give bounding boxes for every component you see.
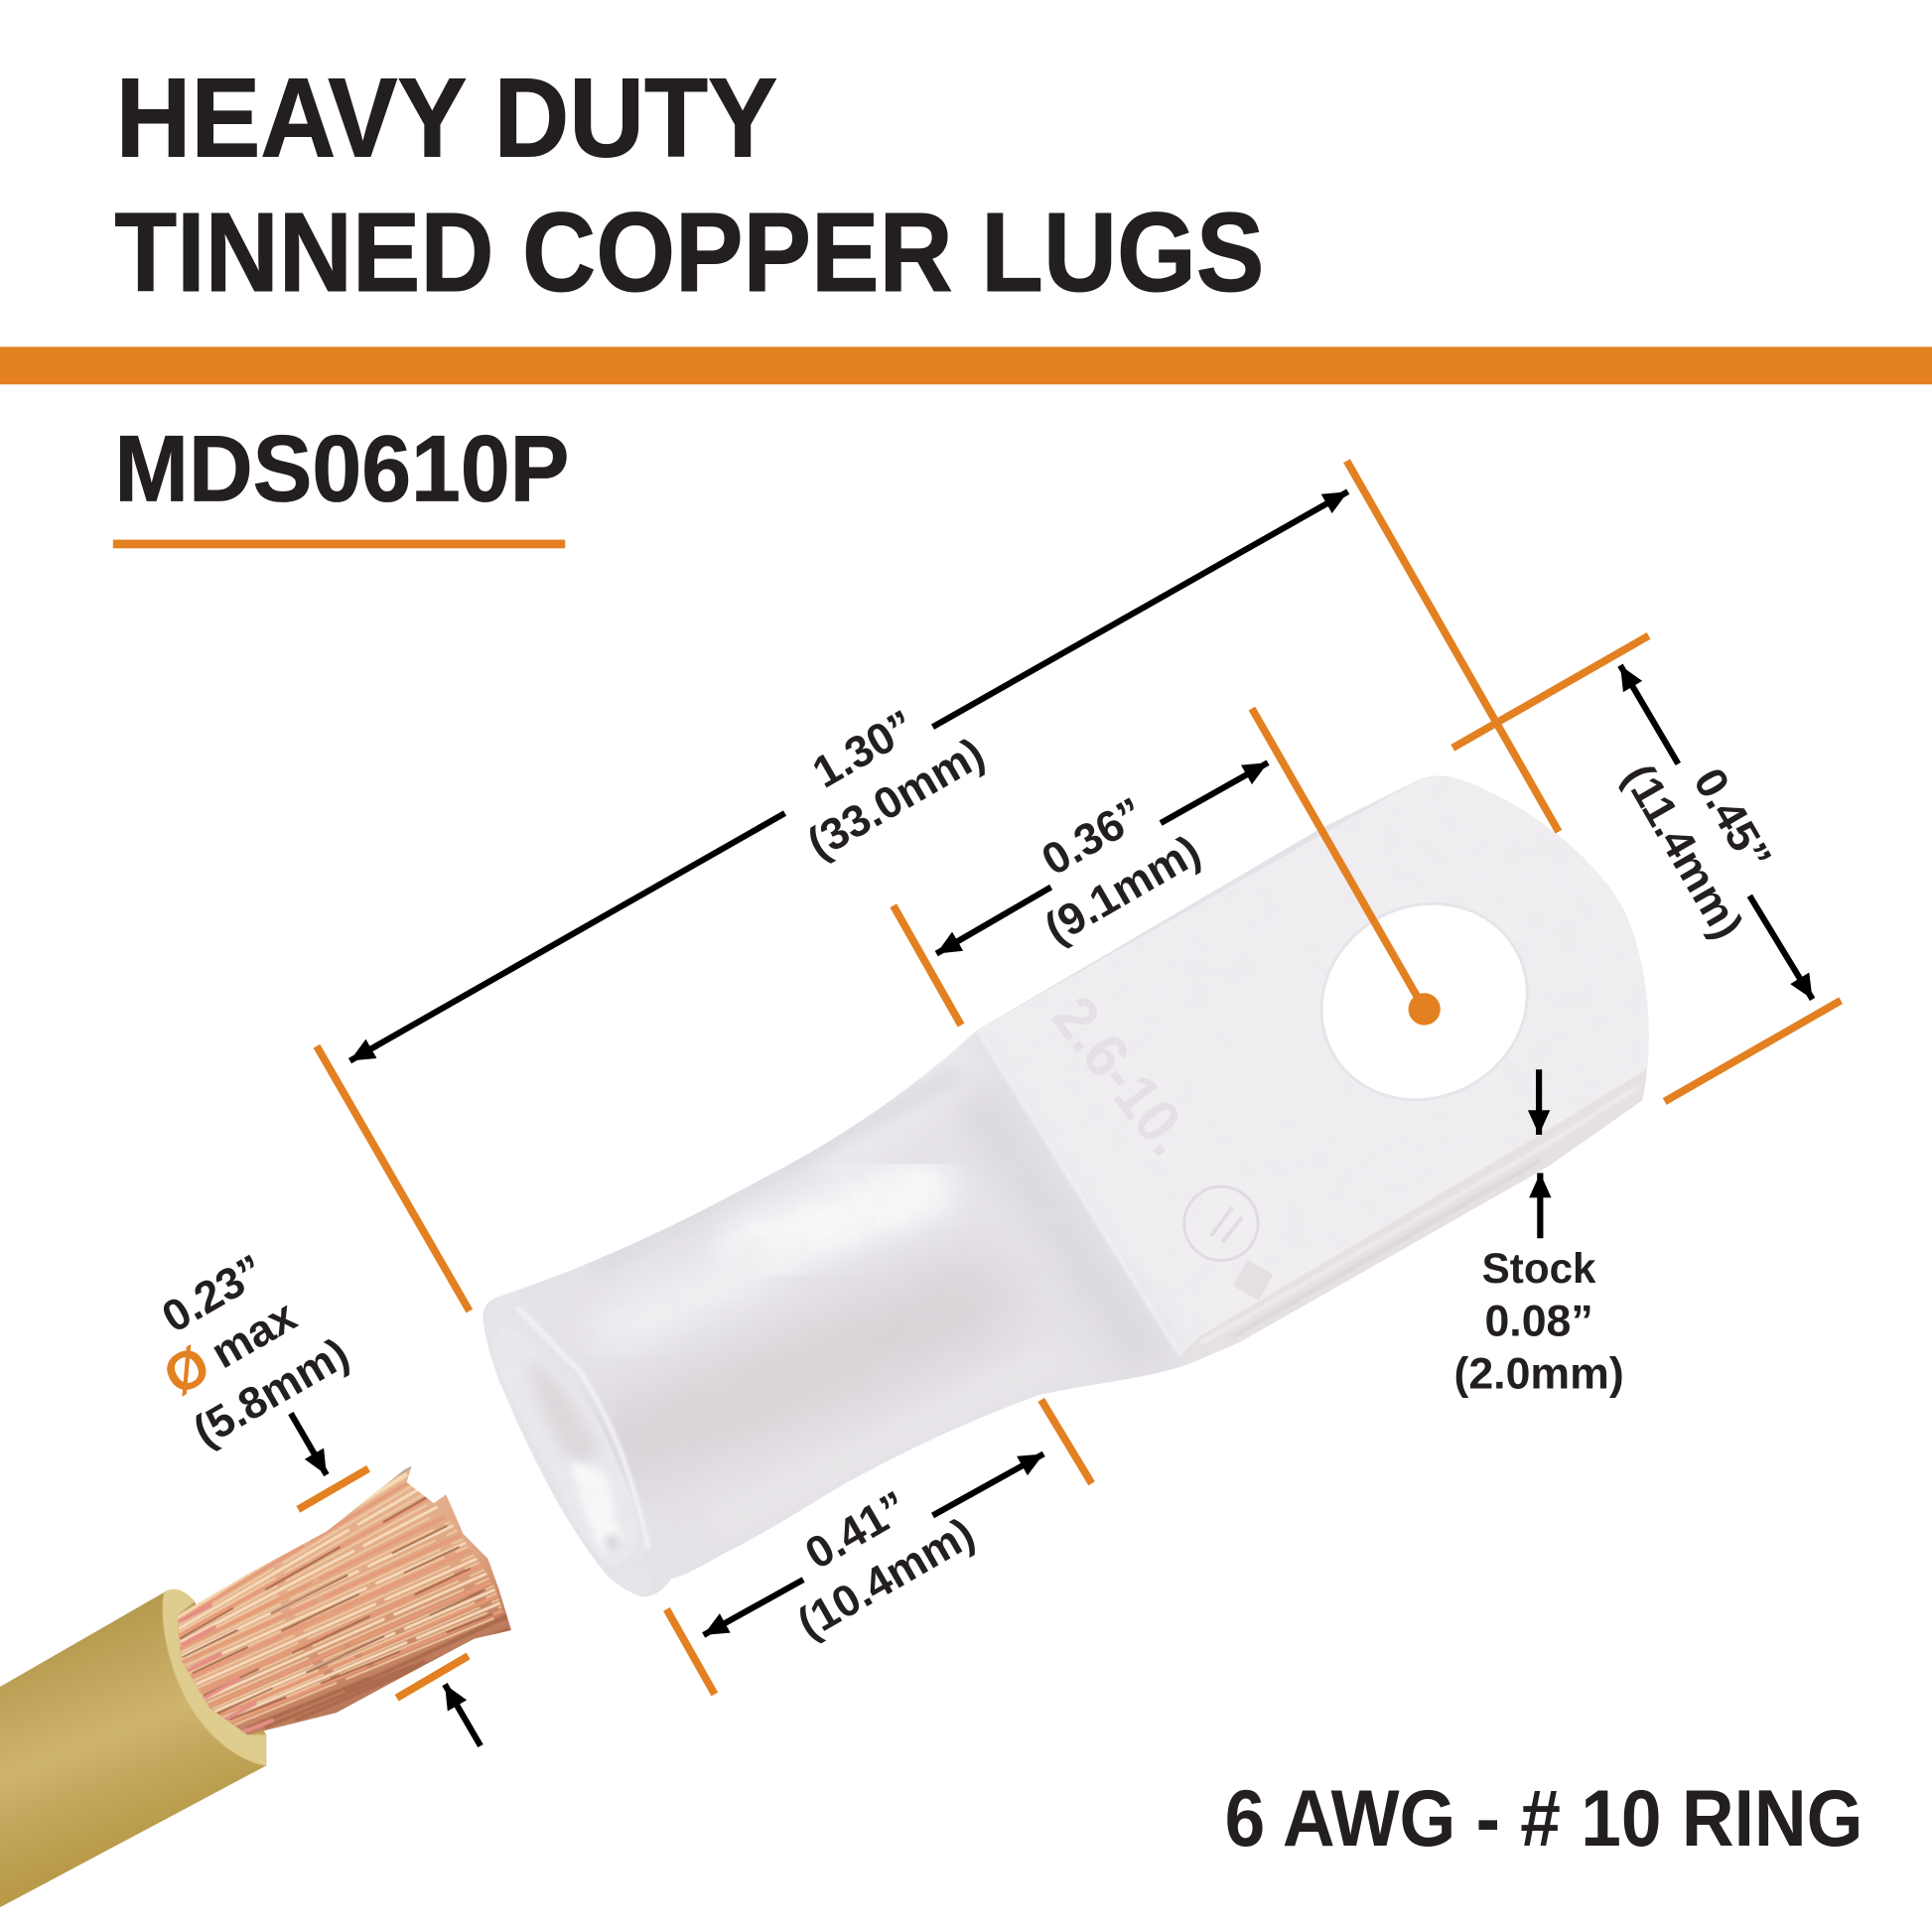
- dimension label: overall length: (33.0mm): [799, 729, 993, 869]
- copper strands: [177, 1466, 511, 1735]
- dimension label: wire diameter: max: [204, 1292, 305, 1378]
- model underline: [113, 540, 565, 548]
- hole centre dot: [1409, 993, 1441, 1026]
- embossed marking: 2.6-10.: [1038, 984, 1203, 1169]
- mounting hole: [1286, 867, 1564, 1137]
- dimension label: wire diameter: Ø: [153, 1333, 220, 1407]
- wire jacket: [0, 1589, 266, 1907]
- black arrows: [291, 491, 1813, 1746]
- orange dimension lines: [298, 461, 1841, 1698]
- dimension label: overall length: 1.30”: [805, 701, 923, 797]
- dimension label: tongue length: 0.36”: [1034, 788, 1153, 886]
- lug photo illustration: [469, 763, 1663, 1614]
- dimension label: wire diameter: (5.8mm): [186, 1329, 357, 1456]
- dimension label: stock thickness: 0.08”: [1484, 1297, 1593, 1345]
- orange header divider: [0, 346, 1932, 384]
- dimension label: barrel length: (10.4mm): [789, 1509, 983, 1648]
- dimension label: wire diameter: [153, 1246, 357, 1456]
- dimension label: tongue width: 0.45”: [1684, 760, 1780, 879]
- jacket cut face: [163, 1589, 266, 1765]
- dimension label: stock thickness: (2.0mm): [1453, 1350, 1624, 1399]
- dimension label: stock thickness: Stock: [1482, 1245, 1596, 1292]
- dimension label: tongue length: (9.1mm): [1036, 826, 1208, 953]
- size caption: 6 AWG - # 10 RING: [1225, 1774, 1863, 1863]
- embossed marking: [1038, 984, 1274, 1301]
- title: HEAVY DUTY: [116, 56, 777, 181]
- wire illustration: [0, 1453, 530, 1907]
- dimension label: wire diameter: 0.23”: [154, 1246, 272, 1342]
- title: TINNED COPPER LUGS: [114, 190, 1264, 315]
- dimension label: stock thickness: [1453, 1245, 1624, 1399]
- title: [114, 56, 1264, 315]
- dimension label: barrel length: 0.41”: [797, 1482, 915, 1579]
- dimension label: tongue width: (11.4mm): [1613, 757, 1752, 947]
- model number: MDS0610P: [114, 416, 569, 520]
